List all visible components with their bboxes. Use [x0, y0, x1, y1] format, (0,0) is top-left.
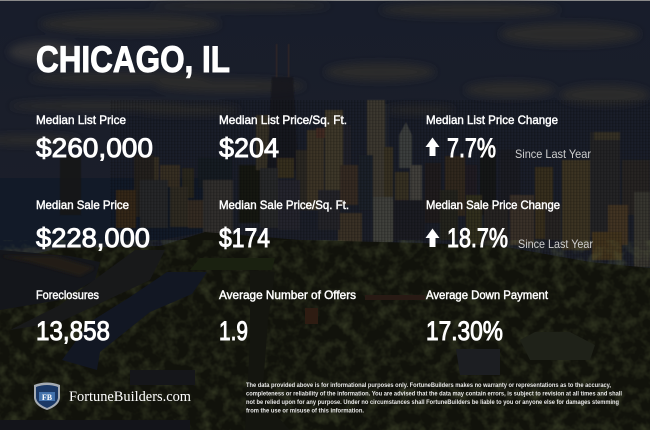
stat: median list price change: Median List Price Change: [426, 113, 558, 127]
stat: median sale price: [36, 198, 150, 253]
lake shoreline: [0, 250, 100, 310]
lake water: [0, 178, 210, 250]
stat: median list price: $260,000: [36, 133, 153, 163]
stat: median sale price per square foot: [219, 198, 349, 253]
icon: up arrow: [426, 138, 440, 156]
stat: average number of offers: Average Number of Offers: [219, 288, 356, 302]
tree canopy: [0, 232, 650, 430]
icon: FortuneBuilders shield logo: [34, 382, 60, 410]
stat: median sale price per square foot: Median Sale Price/Sq. Ft.: [219, 198, 349, 212]
stat: median list price per square foot: [219, 113, 347, 163]
stat: median sale price change: Since Last Year: [518, 237, 593, 251]
stat: average number of offers: [219, 288, 356, 346]
disclaimer text: The data provided above is for informational purposes only. FortuneBuilders makes no warranty or representations as to the accuracy,: [246, 382, 611, 389]
road: [10, 250, 165, 330]
stat: median list price change: 7.7%: [447, 133, 496, 163]
Aon-like tower: [367, 100, 385, 205]
skyline buildings: [60, 44, 650, 267]
stat: average down payment: Average Down Payment: [426, 288, 549, 302]
icon: up arrow: [426, 228, 440, 247]
stat: median sale price: $228,000: [36, 223, 150, 253]
stat: median list price: [36, 113, 153, 163]
stat: median list price per square foot: Median List Price/Sq. Ft.: [219, 113, 347, 127]
building window texture: [110, 100, 650, 270]
stat: median sale price: Median Sale Price: [36, 198, 129, 212]
stat: foreclosures: 13,858: [36, 316, 110, 346]
stat: average down payment: [426, 288, 549, 346]
disclaimer text: [246, 382, 622, 414]
stat: average down payment: 17.30%: [426, 316, 503, 346]
title: CHICAGO, IL: [36, 39, 230, 80]
icon: FortuneBuilders shield logo: FB: [42, 393, 53, 402]
stat: median sale price per square foot: $174: [219, 223, 270, 253]
disclaimer text: from the use or misuse of this information.: [246, 408, 364, 414]
stat: median sale price change: 18.7%: [447, 223, 508, 253]
stat: foreclosures: [36, 288, 110, 346]
John Hancock tower: [267, 77, 298, 170]
stat: median list price change: [426, 113, 591, 163]
stat: median sale price change: Median Sale Price Change: [426, 198, 560, 212]
lawn: [190, 258, 275, 270]
logo wordmark: FortuneBuilders.com: [69, 389, 191, 405]
conservatory: [520, 332, 595, 360]
stat: foreclosures: Foreclosures: [36, 288, 99, 302]
stat: median list price change: Since Last Year: [515, 147, 591, 161]
lagoon: [62, 272, 207, 370]
right cluster: [425, 163, 441, 223]
stat: median list price per square foot: $204: [219, 133, 279, 163]
stat: average number of offers: 1.9: [219, 316, 248, 346]
stat: median list price: Median List Price: [36, 113, 126, 127]
stat: median sale price change: [426, 198, 593, 253]
clouds: [0, 2, 650, 145]
brick building: [305, 308, 318, 324]
